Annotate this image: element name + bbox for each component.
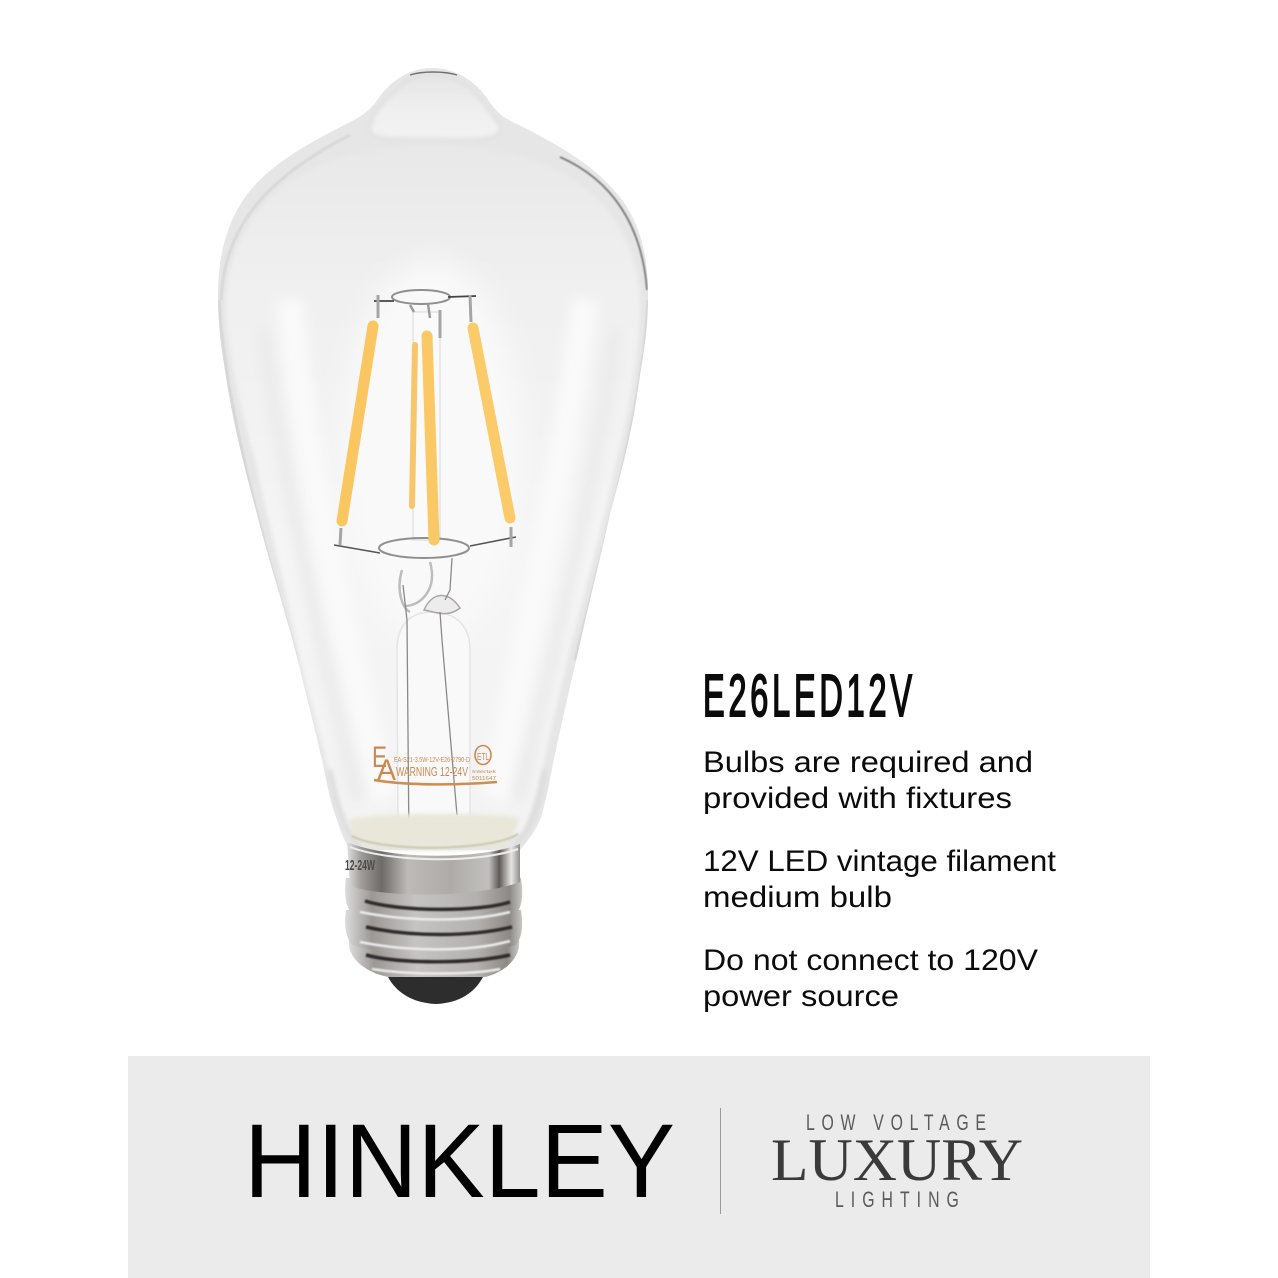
top nipple xyxy=(374,106,496,136)
lower glass shading xyxy=(330,770,545,845)
insulator tip xyxy=(388,977,483,1004)
logo divider xyxy=(720,1108,721,1214)
filament: centre xyxy=(427,336,434,540)
text block: product details xyxy=(703,664,1057,1013)
thread 1 xyxy=(345,878,522,925)
printed label: 5011647 xyxy=(472,776,496,782)
logo: Hinkley: HINKLEY xyxy=(244,1103,675,1220)
centre glow xyxy=(380,274,482,382)
product code: E26LED12V xyxy=(703,664,912,730)
filament: right xyxy=(473,328,510,518)
glass envelope xyxy=(218,68,648,850)
collar rim highlight xyxy=(350,847,518,859)
inner glass body xyxy=(228,255,638,833)
printed label xyxy=(372,741,497,787)
filament: left xyxy=(342,326,373,521)
thread 2 xyxy=(345,910,522,955)
illustration: vintage filament light bulb xyxy=(200,60,670,1004)
note: voltage warning: Do not connect to 120V xyxy=(703,944,1038,977)
screw base xyxy=(345,842,522,1004)
soft white glass bands xyxy=(284,306,591,382)
note: bulb type: medium bulb xyxy=(703,881,892,914)
note: bulbs required: Bulbs are required and xyxy=(703,746,1033,779)
footer band: brand xyxy=(128,1056,1150,1278)
note: bulb type: 12V LED vintage filament xyxy=(703,845,1057,878)
glass stem xyxy=(397,312,470,845)
note: bulbs required: provided with fixtures xyxy=(703,782,1012,815)
logo: Low Voltage Luxury Lighting xyxy=(771,1112,1023,1213)
right edge dark highlight xyxy=(560,157,647,290)
base imprint: 12-24W xyxy=(345,857,375,874)
logo: Low Voltage Luxury Lighting: LIGHTING xyxy=(835,1189,959,1213)
printed label: A xyxy=(377,754,396,787)
note: bulbs required xyxy=(703,746,1033,815)
logo: Low Voltage Luxury Lighting: LUXURY xyxy=(771,1127,1023,1193)
note: voltage warning: power source xyxy=(703,980,899,1013)
thread 3 xyxy=(349,940,519,977)
glass base seal xyxy=(348,814,520,850)
grey reflection bands xyxy=(262,330,616,800)
logo: Low Voltage Luxury Lighting: LOW VOLTAGE xyxy=(806,1112,986,1136)
left edge soft highlight xyxy=(221,135,350,300)
filament support rings xyxy=(334,290,516,558)
thread light reflections xyxy=(360,912,510,974)
printed label: ETL xyxy=(477,752,489,763)
base collar xyxy=(347,842,520,895)
lower edge tone xyxy=(219,300,648,660)
note: bulb type xyxy=(703,845,1057,914)
printed label: WARNING 12-24V xyxy=(396,764,468,779)
thread dark reflections xyxy=(365,901,512,962)
top nipple dark highlight xyxy=(410,72,457,75)
filament: back xyxy=(412,345,415,506)
printed label: Intertek xyxy=(472,769,497,774)
printed label: E xyxy=(372,741,387,774)
printed label: EA-S21-3.5W-12V-E26-2790-D xyxy=(394,757,470,764)
note: voltage warning xyxy=(703,944,1038,1013)
